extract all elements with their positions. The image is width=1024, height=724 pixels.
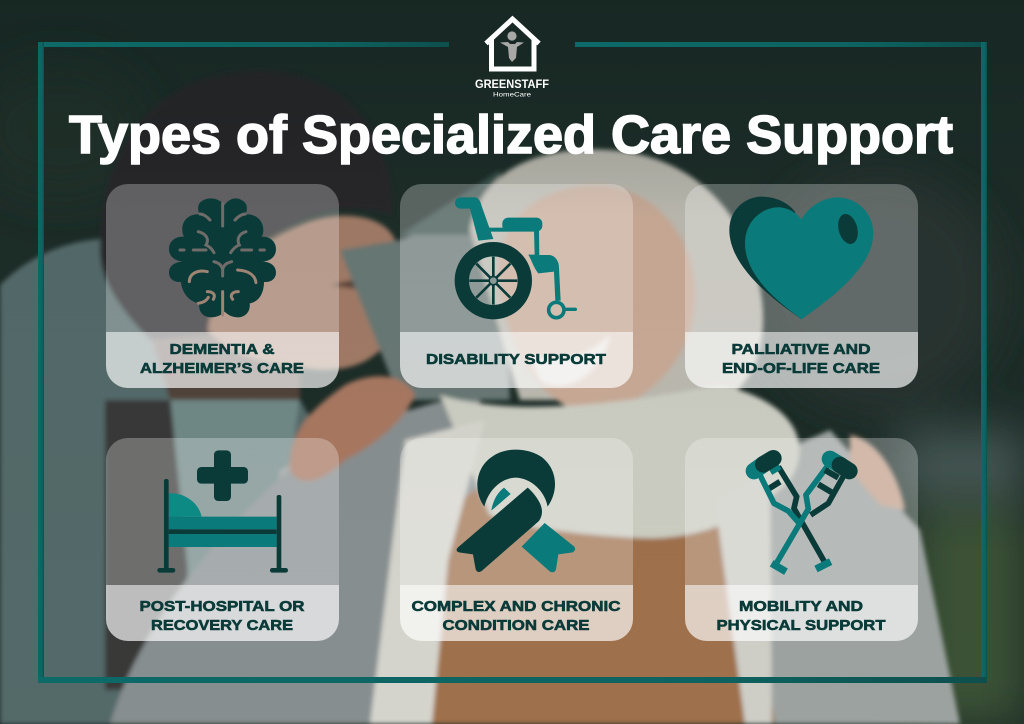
brand name: GREENSTAFF xyxy=(475,79,549,91)
title: Types of Specialized Care Support xyxy=(69,105,953,165)
panel: dementia xyxy=(106,184,339,388)
panel: complex xyxy=(400,438,633,641)
brand subtitle: HomeCare xyxy=(493,92,531,98)
icon: person xyxy=(500,31,524,62)
inner shirt xyxy=(170,395,300,590)
scarf xyxy=(440,385,799,538)
caregiver hair xyxy=(100,70,392,340)
label: DEMENTIA & xyxy=(170,341,275,358)
label: MOBILITY AND xyxy=(739,598,863,615)
elderly hair xyxy=(470,149,763,400)
logo xyxy=(475,19,549,98)
icon: ribbon xyxy=(457,450,575,572)
caregiver neck xyxy=(140,300,300,400)
caregiver hoodie xyxy=(0,239,340,724)
left shoulder shawl xyxy=(110,390,480,724)
elderly face xyxy=(498,185,695,415)
panel: disability xyxy=(400,184,633,388)
caregiver face xyxy=(208,216,397,370)
label: CONDITION CARE xyxy=(442,617,590,634)
panel: mobility xyxy=(685,438,918,641)
label: PHYSICAL SUPPORT xyxy=(716,617,886,634)
label: RECOVERY CARE xyxy=(151,617,293,634)
panel: post-hospital xyxy=(106,438,339,641)
icon: heart xyxy=(729,197,873,319)
label: DISABILITY SUPPORT xyxy=(426,351,606,368)
label: END-OF-LIFE CARE xyxy=(722,360,880,377)
label: PALLIATIVE AND xyxy=(732,341,871,358)
shirt xyxy=(430,480,775,724)
icon: hospital bed xyxy=(157,450,288,573)
icon: crutches xyxy=(754,458,849,572)
panel: palliative xyxy=(685,184,918,388)
shadow under arm xyxy=(105,400,195,690)
white trim xyxy=(370,420,485,724)
icon: brain xyxy=(169,198,276,317)
label: COMPLEX AND CHRONIC xyxy=(412,598,621,615)
hand on shoulder xyxy=(290,376,415,481)
label: ALZHEIMER’S CARE xyxy=(140,360,304,377)
right shawl xyxy=(740,430,960,724)
icon: wheelchair xyxy=(455,197,577,318)
label: POST-HOSPITAL OR xyxy=(140,598,305,615)
icon: house xyxy=(486,19,539,69)
